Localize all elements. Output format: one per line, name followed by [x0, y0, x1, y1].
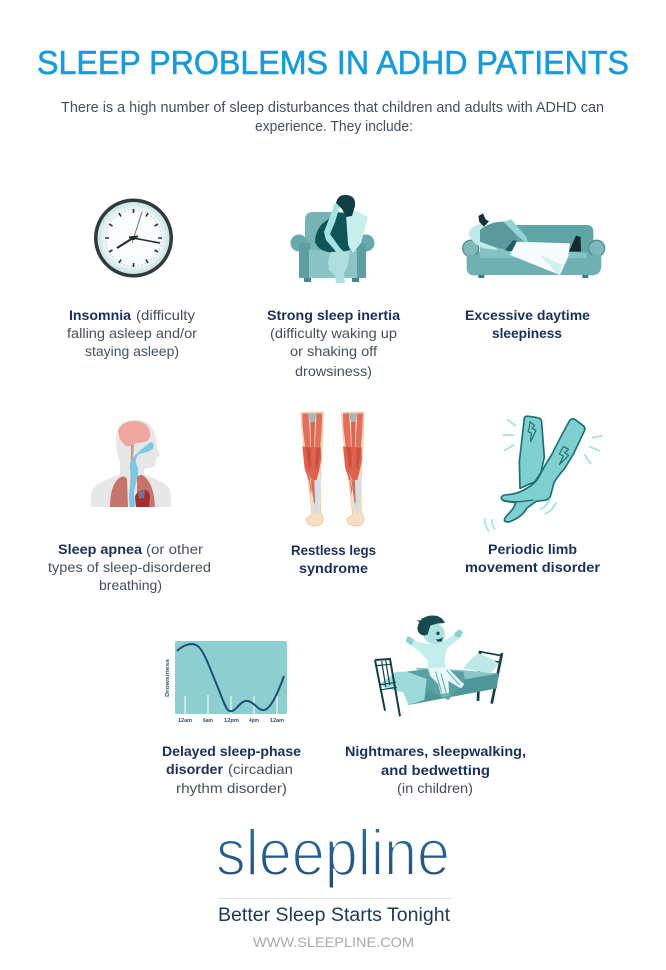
website url: WWW.SLEEPLINE.COM — [253, 934, 414, 950]
chart: drowsiness over time — [165, 641, 287, 724]
chart: drowsiness over time: 12am — [270, 718, 284, 724]
panel: restless legs syndrome — [291, 412, 376, 576]
label: nightmares, sleepwalking, bedwetting: and bedwetting — [381, 762, 490, 778]
label: excessive daytime sleepiness: Excessive daytime — [465, 307, 590, 323]
label: insomnia — [67, 307, 197, 359]
label: delayed sleep-phase disorder: (circadian — [228, 761, 293, 777]
icon: person on armchair — [290, 195, 374, 283]
intro text — [61, 100, 604, 135]
label: strong sleep inertia — [267, 307, 400, 379]
panel: sleep apnea — [48, 420, 211, 593]
icon: twitching legs — [485, 416, 602, 531]
icon: person lying on sofa — [463, 213, 605, 278]
tagline: Better Sleep Starts Tonight — [218, 905, 451, 926]
chart: drowsiness over time: 12pm — [224, 718, 239, 724]
label: sleep apnea: (or other — [146, 541, 203, 557]
chart: drowsiness over time: Drowsiness — [165, 659, 171, 697]
label: restless legs syndrome: syndrome — [299, 560, 368, 576]
chart: drowsiness over time: 6am — [203, 718, 213, 724]
title: SLEEP PROBLEMS IN ADHD PATIENTS — [37, 44, 629, 81]
label: sleep apnea: types of sleep-disordered — [48, 559, 211, 575]
label: periodic limb movement disorder: movement disorder — [465, 559, 601, 575]
logo: sleepline: sleepline — [216, 816, 450, 889]
label: strong sleep inertia: drowsiness) — [295, 363, 372, 379]
chart: drowsiness over time: 4pm — [249, 718, 259, 724]
label: insomnia: staying asleep) — [85, 343, 179, 359]
label: sleep apnea — [48, 541, 211, 593]
intro text: There is a high number of sleep disturbances that children and adults with ADHD can — [61, 100, 604, 116]
icon: child sitting on bed — [375, 615, 502, 716]
icon: wall clock — [94, 198, 173, 278]
label: nightmares, sleepwalking, bedwetting — [345, 743, 526, 796]
panel: insomnia — [67, 198, 197, 359]
panel: periodic limb movement disorder — [465, 416, 602, 575]
label: periodic limb movement disorder — [465, 541, 601, 575]
intro text: experience. They include: — [255, 119, 413, 135]
label: restless legs syndrome — [291, 542, 376, 576]
label: delayed sleep-phase disorder: rhythm disorder) — [176, 780, 287, 796]
icon: leg muscles — [301, 412, 364, 526]
label: sleep apnea: breathing) — [99, 577, 162, 593]
label: delayed sleep-phase disorder: disorder — [166, 761, 224, 777]
label: sleep apnea: Sleep apnea — [58, 541, 142, 557]
label: periodic limb movement disorder: Periodic limb — [488, 541, 577, 557]
logo: sleepline — [216, 816, 451, 926]
panel: excessive daytime sleepiness — [463, 213, 605, 341]
label: strong sleep inertia: (difficulty waking up — [270, 325, 397, 341]
label: nightmares, sleepwalking, bedwetting: Nightmares, sleepwalking, — [345, 743, 526, 759]
label: excessive daytime sleepiness — [465, 307, 590, 341]
label: delayed sleep-phase disorder — [162, 743, 301, 796]
chart: drowsiness over time: 12am — [178, 718, 192, 724]
label: delayed sleep-phase disorder: Delayed sleep-phase — [162, 743, 301, 759]
icon: respiratory system — [91, 420, 171, 507]
label: nightmares, sleepwalking, bedwetting: (in children) — [397, 780, 473, 796]
label: insomnia: Insomnia — [69, 307, 131, 323]
panel: delayed sleep-phase disorder — [162, 641, 301, 796]
label: strong sleep inertia: Strong sleep inertia — [267, 307, 400, 323]
label: insomnia: (difficulty — [136, 307, 195, 323]
label: restless legs syndrome: Restless legs — [291, 542, 376, 558]
label: insomnia: falling asleep and/or — [67, 325, 197, 341]
label: strong sleep inertia: or shaking off — [290, 343, 377, 359]
panel: strong sleep inertia — [267, 195, 400, 379]
panel: nightmares, sleepwalking, bedwetting — [345, 615, 526, 796]
label: excessive daytime sleepiness: sleepiness — [492, 325, 562, 341]
